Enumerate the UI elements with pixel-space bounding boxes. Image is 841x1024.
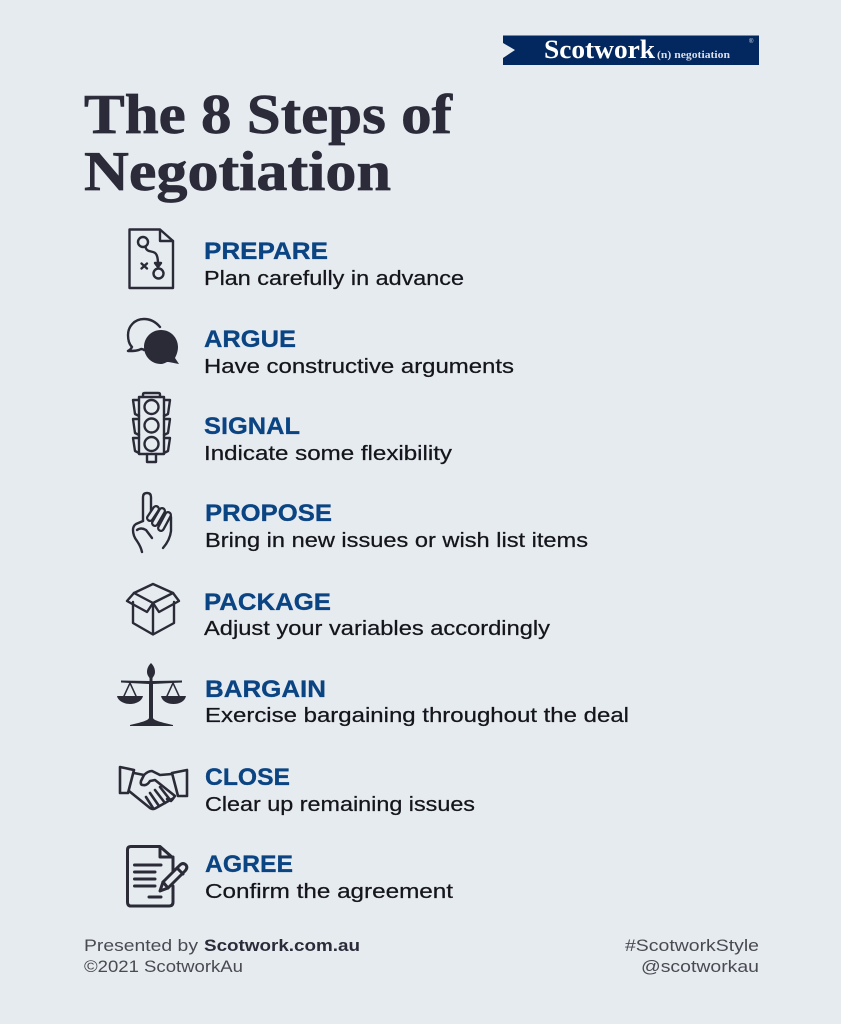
text: close: Clear up remaining issues xyxy=(205,793,475,816)
logo: Scotwork banner: (n) negotiation xyxy=(657,49,730,61)
text: prepare xyxy=(204,238,464,290)
footer: social handles xyxy=(625,936,759,976)
icon: close handshake xyxy=(120,767,187,809)
text: close: CLOSE xyxy=(205,764,290,791)
text: package: Adjust your variables accordingly xyxy=(204,617,551,640)
text: package xyxy=(204,589,551,640)
icon: prepare plan document xyxy=(130,230,173,288)
footer: credits xyxy=(84,936,360,976)
footer: social handles: @scotworkau xyxy=(641,957,759,976)
title: The 8 Steps of xyxy=(84,84,453,146)
text: propose: PROPOSE xyxy=(205,500,332,527)
footer: credits: Scotwork.com.au xyxy=(204,936,360,955)
text: signal: SIGNAL xyxy=(204,413,300,440)
text: package: PACKAGE xyxy=(204,589,331,616)
text: argue: ARGUE xyxy=(204,326,296,353)
icon: agree signed document xyxy=(128,846,187,906)
text: argue: Have constructive arguments xyxy=(204,355,514,378)
text: propose xyxy=(205,500,588,552)
icon: bargain scales xyxy=(117,663,186,726)
icon: propose raised finger xyxy=(133,493,171,552)
title: Negotiation xyxy=(84,141,391,203)
logo: Scotwork banner: Scotwork xyxy=(544,35,656,64)
text: agree: Confirm the agreement xyxy=(205,880,453,903)
title xyxy=(84,84,453,203)
footer: credits: ©2021 ScotworkAu xyxy=(84,957,243,976)
text: bargain: BARGAIN xyxy=(205,676,326,703)
logo: Scotwork banner: ® xyxy=(749,38,754,45)
text: bargain: Exercise bargaining throughout the deal xyxy=(205,704,629,727)
text: argue xyxy=(204,326,514,378)
icon: package box xyxy=(127,584,179,634)
text: prepare: PREPARE xyxy=(204,238,328,265)
footer: social handles: #ScotworkStyle xyxy=(625,936,759,955)
text: close xyxy=(205,764,475,816)
footer: credits: Presented by xyxy=(84,936,199,955)
icon: argue speech bubbles xyxy=(128,319,179,364)
text: signal: Indicate some flexibility xyxy=(204,442,453,465)
logo: Scotwork banner xyxy=(503,35,759,65)
text: signal xyxy=(204,413,453,465)
text: prepare: Plan carefully in advance xyxy=(204,267,464,290)
icon: signal traffic light xyxy=(133,393,170,462)
text: agree xyxy=(205,851,453,903)
text: bargain xyxy=(205,676,629,727)
text: agree: AGREE xyxy=(205,851,293,878)
text: propose: Bring in new issues or wish list items xyxy=(205,529,588,552)
